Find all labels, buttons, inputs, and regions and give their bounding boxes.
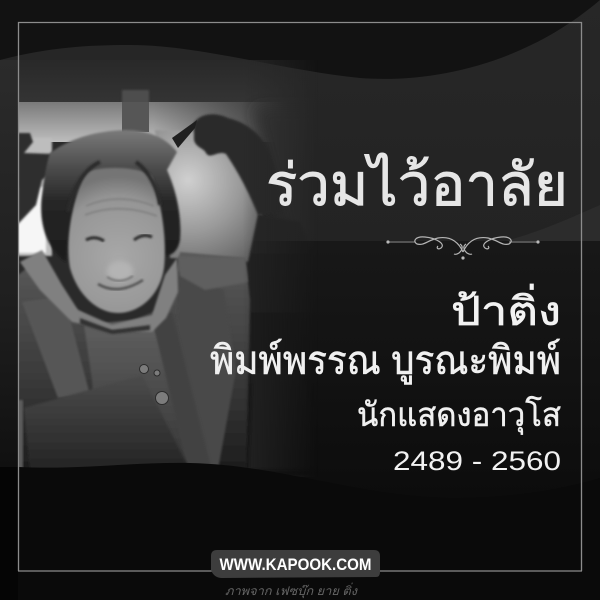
left edge gravel strip: [18, 400, 23, 470]
scarf: [20, 250, 178, 332]
jacket right panel: [176, 270, 236, 470]
shirt: [84, 319, 186, 460]
fringe strands: [74, 160, 161, 206]
jacket collar: [178, 256, 248, 290]
jacket: [18, 252, 250, 470]
hair: [41, 130, 180, 262]
shirt strap: [155, 330, 204, 464]
background below wall: [19, 244, 250, 334]
eyes: [86, 236, 152, 241]
nose: [108, 262, 133, 280]
website badge: [211, 550, 380, 578]
bright ground: [155, 130, 262, 262]
frame bottom left: [18, 570, 212, 572]
left bright window: [18, 138, 52, 256]
frame bottom right: [378, 570, 582, 572]
photo credit: ภาพจาก เฟซบุ๊ก ยาย ติ่ง: [225, 582, 358, 599]
right glove: [192, 113, 264, 215]
occupation: นักแสดงอาวุโส: [357, 396, 561, 435]
website badge: WWW.KAPOOK.COM: [220, 555, 372, 574]
textured lower sleeve: [249, 384, 266, 468]
bottom wave covering the photo: [0, 463, 600, 600]
mouth: [98, 280, 143, 289]
title: ร่วมไว้อาลัย: [266, 152, 568, 218]
dark sleeve: [246, 214, 285, 474]
jacket left lapel: [22, 296, 90, 398]
face: [68, 168, 165, 313]
wall band: [19, 102, 267, 142]
left glove: [19, 131, 51, 224]
lower left corner shadow: [0, 467, 18, 600]
years: 2489 - 2560: [393, 446, 561, 476]
halo right of glove: [258, 114, 273, 142]
concrete pillar: [122, 90, 150, 102]
hair strand held up: [172, 120, 197, 148]
forehead wrinkles: [85, 199, 157, 216]
photo: woman holding up her hair: [19, 60, 288, 471]
photo upper backdrop: [19, 60, 288, 102]
flap of bag: [24, 390, 187, 468]
ornament divider: [387, 237, 539, 259]
flowers on shirt: [140, 364, 168, 404]
name: nickname: ป้าติ่ง: [451, 284, 561, 334]
name: full name: พิมพ์พรรณ บูรณะพิมพ์: [210, 338, 561, 384]
